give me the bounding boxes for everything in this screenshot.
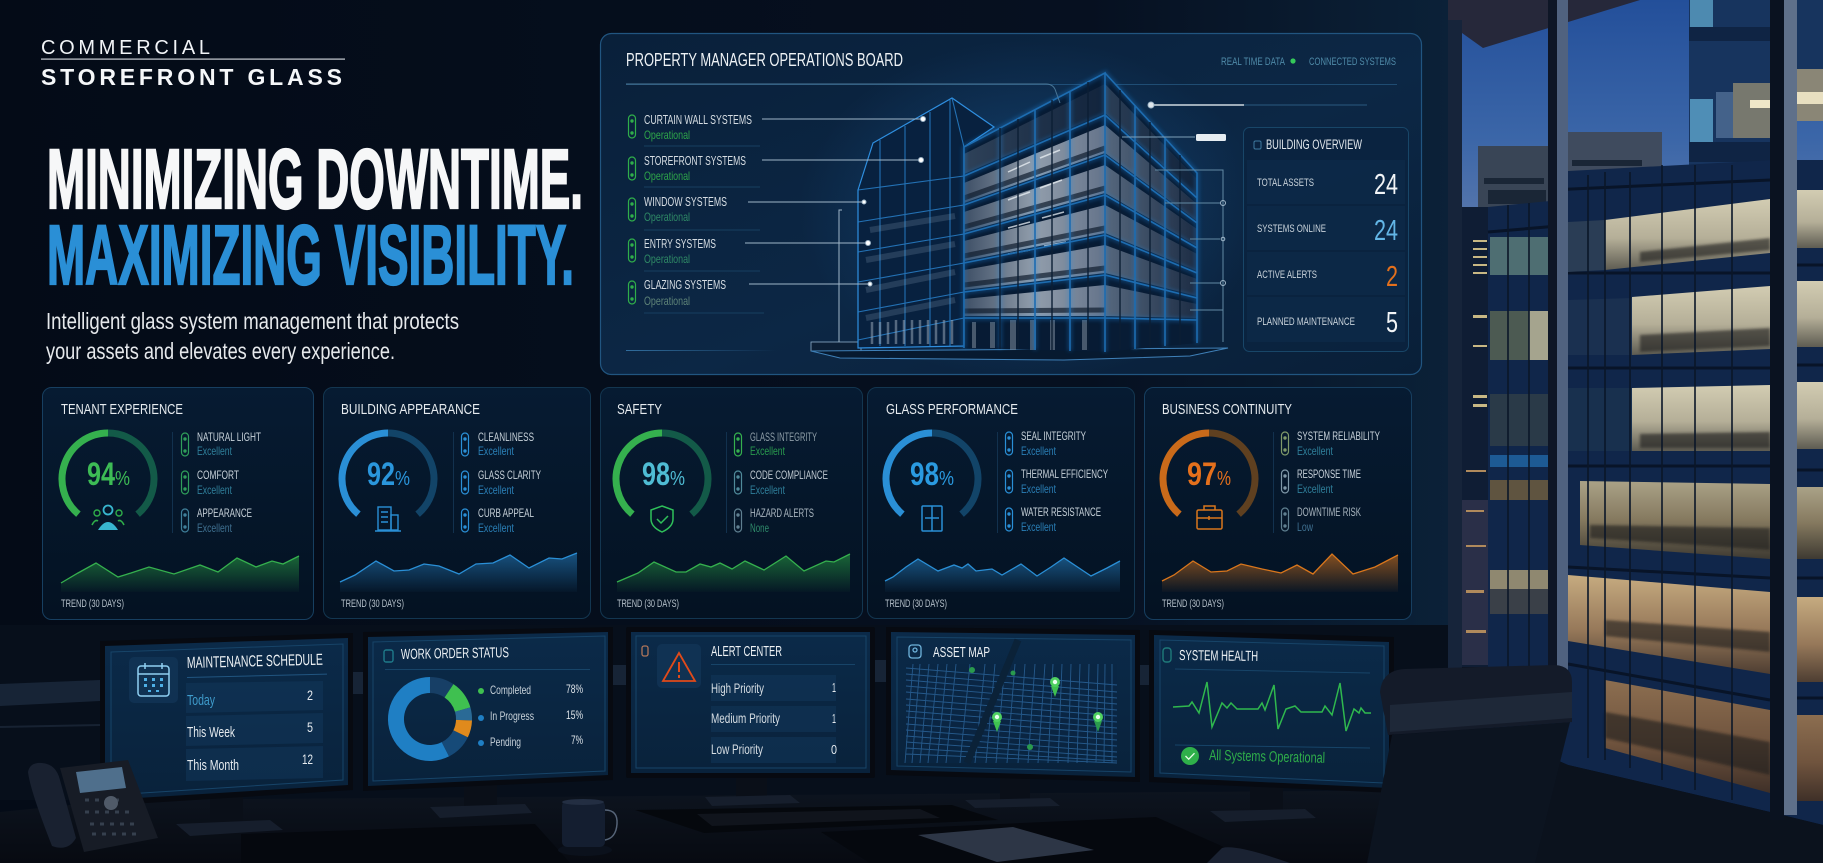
stat active alerts: ACTIVE ALERTS [1257,269,1317,281]
donut legend [478,682,583,749]
desks inside lit floors [1590,238,1770,775]
calendar icon [129,657,178,703]
item curtain wall: Operational [644,128,690,142]
indicator list: Excellent [197,444,232,458]
indicator list: HAZARD ALERTS [750,506,814,520]
indicator list: SEAL INTEGRITY [1021,429,1086,443]
card title: SAFETY [617,401,662,418]
desk phone [28,760,158,852]
monitor: system health [1149,630,1394,793]
donut chart [396,685,464,753]
gauge 98 percent: % [939,468,954,490]
panel: business continuity [1144,388,1412,620]
card title: GLASS PERFORMANCE [886,401,1018,418]
alert rows: 1 [832,711,836,726]
logo line one: COMMERCIAL [41,37,210,59]
notepad [918,827,1094,862]
mullion one [1548,0,1568,670]
window frame left [1448,20,1462,670]
item curtain wall: CURTAIN WALL SYSTEMS [644,112,752,127]
overview title: BUILDING OVERVIEW [1266,137,1362,152]
subtitle: Intelligent glass system management that protects [46,308,459,334]
stat systems online [1257,215,1398,247]
keyboard [635,805,998,833]
icon: briefcase [1197,506,1222,529]
schedule rows [187,687,313,774]
stat total assets: 24 [1374,169,1398,201]
gauge 92 percent: % [395,468,410,490]
right strip of lit windows [1797,190,1823,801]
indicator list: Excellent [1021,520,1056,534]
central face [964,73,1105,352]
coffee mug [558,799,617,856]
monitor stands [176,775,1316,836]
gauge 97 percent [1163,433,1255,514]
armrest [1207,847,1290,863]
lit floors main [1568,199,1770,793]
status text: All Systems Operational [1209,747,1325,767]
item storefront: STOREFRONT SYSTEMS [644,153,746,168]
trend label: TREND (30 DAYS) [341,598,404,610]
icon: building [375,507,401,531]
schedule title: MAINTENANCE SCHEDULE [187,652,323,672]
gauge 94 percent [62,433,154,514]
donut legend: Pending [490,735,521,749]
item storefront: Operational [644,169,690,183]
icon: people [92,506,124,530]
card title: TENANT EXPERIENCE [61,401,183,418]
upper tower [1689,0,1823,172]
wing floors [858,98,964,346]
subtitle [46,308,459,364]
stat active alerts [1257,261,1398,293]
logo [41,37,345,90]
indicator list: GLASS INTEGRITY [750,430,817,444]
status real time data [1221,56,1396,68]
handset [28,763,76,848]
alert rows: Low Priority [711,741,763,757]
alert icon [642,644,701,688]
stat systems online: 24 [1374,215,1398,247]
status check [1181,747,1199,765]
overview title [1254,137,1362,152]
system list [628,112,764,313]
item glazing: GLAZING SYSTEMS [644,277,726,292]
indicator list: Excellent [478,483,514,497]
panel: safety [600,388,862,618]
background wall [0,0,1450,863]
main building mass [1488,160,1823,825]
indicator list: NATURAL LIGHT [197,430,261,444]
donut legend: 78% [566,682,583,696]
indicator list [1282,429,1380,534]
left strip of lit windows [1490,237,1548,614]
leader lines [626,84,1367,342]
schedule rows: 5 [307,719,313,735]
monitor: work order status [363,627,613,791]
base platform [811,342,1228,360]
building wireframe [811,73,1228,360]
gauge 94 percent: 94 [87,456,115,492]
alert title: ALERT CENTER [711,644,782,660]
indicator list: None [750,521,769,535]
far tower with lights [1462,207,1490,667]
stat active alerts: 2 [1386,261,1398,293]
alert rows: 0 [831,742,837,757]
sparkline blue [340,553,577,592]
gauge 98 percent [886,433,978,514]
board title: PROPERTY MANAGER OPERATIONS BOARD [626,50,903,70]
indicator list: Excellent [1297,444,1333,458]
indicator list: Excellent [1297,482,1333,496]
stat planned maintenance [1257,307,1398,339]
indicator list [462,430,541,535]
item window: WINDOW SYSTEMS [644,194,727,209]
gauge 97 percent: % [1217,468,1231,490]
indicator list [734,430,828,535]
monitor: asset map [886,627,1140,782]
sparkline green [617,554,850,592]
item window: Operational [644,210,690,224]
sparkline orange [1162,554,1398,592]
trend label: TREND (30 DAYS) [61,598,124,610]
indicator list: Excellent [1021,444,1056,458]
gauge 92 percent [342,433,434,514]
gauge 92 percent: 92 [367,456,395,492]
icon: window [922,506,942,531]
icon: shield [651,506,673,532]
right face [1105,73,1197,352]
indicator list: CLEANLINESS [478,430,534,444]
stat total assets [1257,169,1398,201]
card title: BUSINESS CONTINUITY [1162,401,1292,418]
indicator list: DOWNTIME RISK [1297,505,1361,519]
chair back [1367,722,1570,863]
headrest [1380,665,1572,735]
headline line one: MINIMIZING DOWNTIME. [47,132,583,226]
building mullions [1508,165,1732,800]
indicator list: CODE COMPLIANCE [750,468,828,482]
desk mat and notepad [821,817,1260,863]
indicator list: THERMAL EFFICIENCY [1021,467,1108,481]
card title: BUILDING APPEARANCE [341,401,480,418]
gauge 98 percent: % [670,468,685,490]
indicator list: RESPONSE TIME [1297,467,1361,481]
mullion two [1770,0,1797,820]
sky [1448,0,1823,230]
indicator list: Excellent [1021,482,1056,496]
indicator list: Excellent [197,521,232,535]
headline line two: MAXIMIZING VISIBILITY. [47,208,574,302]
indicator list: Excellent [478,521,514,535]
indicator list: Excellent [750,444,785,458]
gauge 98 percent [616,433,708,514]
trend label: TREND (30 DAYS) [885,598,947,610]
health icon [1163,648,1171,662]
item window [628,194,727,224]
indicator list [1006,429,1108,534]
headline [47,132,583,302]
phone body [60,760,158,852]
ecg line [1173,682,1371,731]
panel: property manager operations board [600,34,1422,380]
indicator list: GLASS CLARITY [478,468,541,482]
indicator list: Excellent [750,483,785,497]
subtitle: your assets and elevates every experience. [46,338,395,364]
lobby windows [972,320,1087,350]
panel: tenant experience [42,388,314,620]
work order icon [384,650,393,662]
indicator list: CURB APPEAL [478,506,534,520]
alert rows: Medium Priority [711,710,780,726]
window furniture and lights [964,148,1105,311]
stat planned maintenance: 5 [1386,307,1398,339]
panel: building appearance [324,388,590,618]
indicator list: Excellent [478,444,514,458]
leader chip [1196,134,1226,141]
indicator list: Low [1297,520,1313,534]
stat systems online: SYSTEMS ONLINE [1257,223,1326,235]
panel: glass performance [868,388,1134,618]
indicator list: Excellent [197,483,232,497]
indicator list [182,430,261,535]
map icon [909,645,921,658]
item entry: Operational [644,252,690,266]
structure glow [964,73,1197,352]
item storefront [628,153,746,183]
item curtain wall [628,112,752,142]
left wing [858,98,994,348]
soffit [1448,0,1640,48]
building halo [800,40,1260,380]
stat total assets: TOTAL ASSETS [1257,177,1314,189]
distant grey buildings [1478,132,1662,210]
indicator list: APPEARANCE [197,506,252,520]
building overview panel [1244,128,1408,352]
schedule rows: 2 [307,687,313,703]
work order title: WORK ORDER STATUS [401,645,509,663]
logo line two: STOREFRONT GLASS [41,64,342,90]
gauge 98 percent: 98 [642,456,670,492]
spandrel lines [1488,180,1823,700]
monitor: alert center [626,627,875,778]
indicator list: SYSTEM RELIABILITY [1297,429,1380,443]
map pins [969,667,1103,750]
item entry [628,236,716,266]
schedule rows: This Week [187,724,235,741]
gauge 97 percent: 97 [1187,456,1217,492]
stat planned maintenance: PLANNED MAINTENANCE [1257,316,1355,328]
phone screen [76,767,126,793]
monitor: maintenance schedule [100,633,353,806]
trend label: TREND (30 DAYS) [617,598,679,610]
indicator list: COMFORT [197,468,239,482]
back ledge and desk [0,625,1448,863]
item glazing: Operational [644,294,690,308]
schedule rows: This Month [187,757,239,774]
schedule rows: Today [187,692,215,709]
item entry: ENTRY SYSTEMS [644,236,716,251]
sparkline blue [885,558,1120,592]
sparkline green [61,556,299,592]
office chair [1207,665,1572,863]
window view: city at dusk [1350,0,1823,863]
street map [905,640,1117,763]
floor below window [1350,730,1823,863]
health title: SYSTEM HEALTH [1179,648,1258,665]
status real time data: CONNECTED SYSTEMS [1309,56,1396,68]
donut legend: 7% [571,733,583,747]
indicator list: WATER RESISTANCE [1021,505,1101,519]
alert rows: 1 [832,680,836,695]
gauge 98 percent: 98 [910,456,939,492]
donut legend: In Progress [490,709,534,723]
item glazing [628,277,726,308]
donut legend: 15% [566,708,583,722]
gauge 94 percent: % [115,468,130,490]
alert rows: High Priority [711,680,764,696]
map title: ASSET MAP [933,645,990,661]
alert rows [711,680,837,757]
donut legend: Completed [490,683,531,697]
status real time data: REAL TIME DATA [1221,56,1285,68]
trend label: TREND (30 DAYS) [1162,598,1224,610]
schedule rows: 12 [302,751,313,767]
